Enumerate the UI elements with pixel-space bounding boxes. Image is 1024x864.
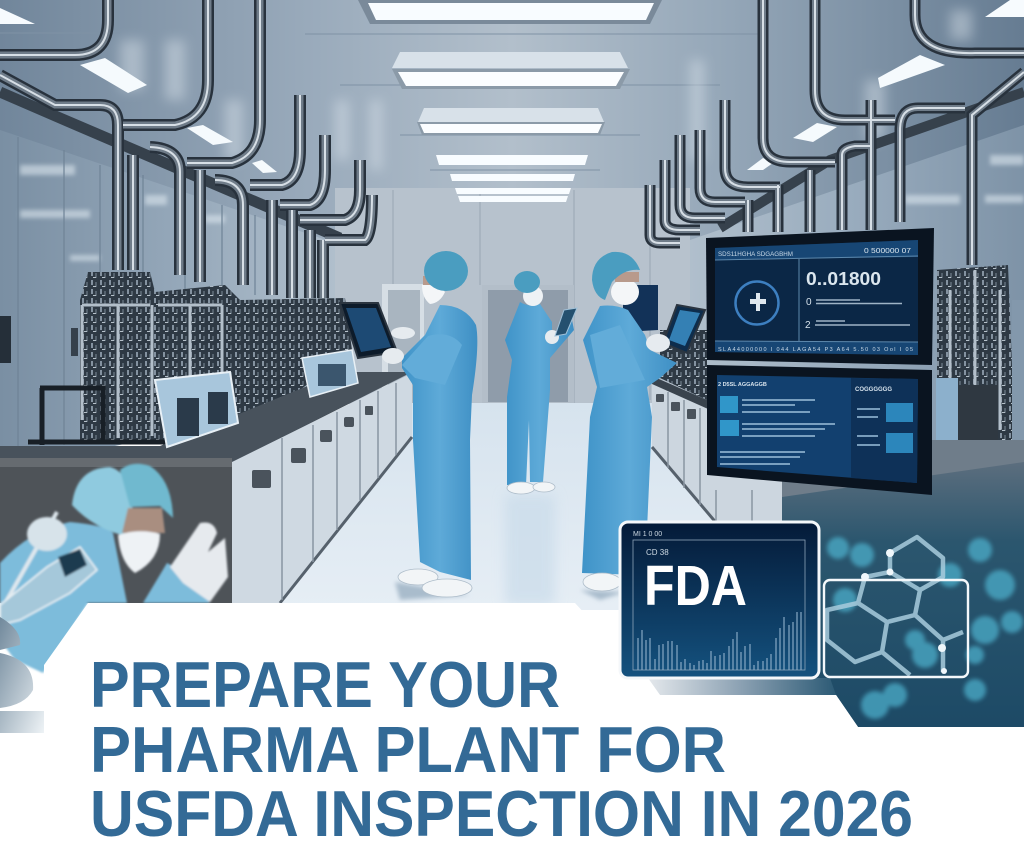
reactor frames — [82, 305, 222, 438]
cleanroom background — [0, 0, 1024, 610]
lower gradient strip — [648, 678, 836, 695]
dashboard footer text: SLA44000000 I 044 LAGA54 P3 A64 5.50 03 Ool I 05 — [718, 347, 913, 353]
FDA label: FDA — [644, 554, 747, 618]
left wall panels — [18, 137, 255, 450]
FDA data card — [620, 522, 819, 678]
lower monitor side heading: COGGGGGG — [855, 387, 892, 393]
inset dark background — [0, 458, 232, 603]
left counter — [0, 372, 412, 603]
dashboard line two: 2 — [805, 320, 811, 331]
ceiling lights — [0, 0, 1024, 202]
lab technician inset photo — [0, 458, 232, 733]
gown body — [0, 522, 127, 673]
title line two: PHARMA PLANT FOR — [90, 713, 726, 786]
wall control panel — [0, 316, 11, 363]
pipework right — [650, 0, 1024, 265]
floor reflection — [505, 495, 555, 605]
gloves — [170, 522, 228, 602]
dark machine base — [958, 385, 998, 443]
ceiling — [0, 0, 1024, 260]
hood — [72, 467, 133, 537]
pipework left — [0, 0, 372, 298]
goggles and skin — [122, 508, 165, 533]
gauge icon — [736, 282, 778, 324]
cable rack right — [720, 92, 1024, 228]
floor shadows under feet — [395, 582, 625, 600]
card code: CD 38 — [646, 548, 669, 557]
stacked wall monitors — [706, 228, 934, 495]
molecule panel background — [648, 462, 1024, 727]
glass instrument box small — [302, 350, 358, 397]
glowing bokeh dots — [766, 537, 1023, 719]
title — [90, 648, 913, 850]
reactor row left — [80, 272, 352, 440]
right counter — [652, 376, 790, 610]
hair cap — [120, 464, 173, 518]
right wall edge light — [1012, 300, 1024, 440]
ceiling glow streaks — [120, 10, 972, 170]
dark base stand — [28, 388, 170, 445]
dashboard header value: 0 500000 07 — [864, 246, 911, 255]
right wall — [690, 125, 1024, 470]
white cabinet fronts — [232, 373, 412, 603]
back doors — [382, 284, 574, 404]
left process equipment — [0, 272, 352, 445]
hexagon molecule — [827, 537, 963, 675]
right process equipment — [660, 265, 1024, 443]
dark screen behind — [623, 285, 658, 332]
dashboard reading: 0..01800 — [806, 269, 881, 289]
person with tablet, foreground right — [582, 252, 705, 591]
lower right counter block — [782, 440, 1024, 530]
cable rack left — [0, 92, 340, 238]
white outlined frame — [824, 580, 968, 677]
left wall glow bands — [20, 165, 225, 261]
lower monitor heading: 2 D5SL AGGAGGB — [718, 382, 767, 388]
ceiling seams — [0, 33, 760, 170]
dashboard header text: SDS11HGHA SDGAGBHM — [718, 252, 793, 258]
cabinet handles — [252, 406, 373, 488]
lower monitor — [707, 365, 932, 495]
left wall — [0, 130, 335, 470]
title line one: PREPARE YOUR — [90, 648, 560, 721]
right glass box — [936, 378, 958, 443]
person with tablet, foreground left — [340, 251, 477, 597]
white title panel — [0, 603, 1024, 864]
glassware at lower left — [0, 617, 44, 733]
floor — [270, 403, 800, 610]
cabinet baseboard — [280, 437, 412, 603]
back wall — [335, 188, 690, 404]
person in background — [505, 271, 577, 494]
title line three: USFDA INSPECTION IN 2026 — [90, 777, 913, 850]
dashboard line one: 0 — [806, 297, 812, 308]
counter top — [0, 372, 412, 462]
small wall switch — [71, 328, 78, 356]
card small caption: MI 1 0 00 — [633, 531, 662, 538]
glass instrument box large — [155, 372, 238, 447]
top monitor — [706, 228, 934, 365]
vial and syringe — [3, 512, 57, 607]
right frames — [950, 270, 1000, 440]
card bar chart — [638, 612, 801, 670]
molecule atoms — [861, 549, 947, 674]
cabinet dividers — [282, 383, 396, 600]
face mask — [118, 531, 160, 573]
right wall glow bands — [905, 155, 1024, 204]
